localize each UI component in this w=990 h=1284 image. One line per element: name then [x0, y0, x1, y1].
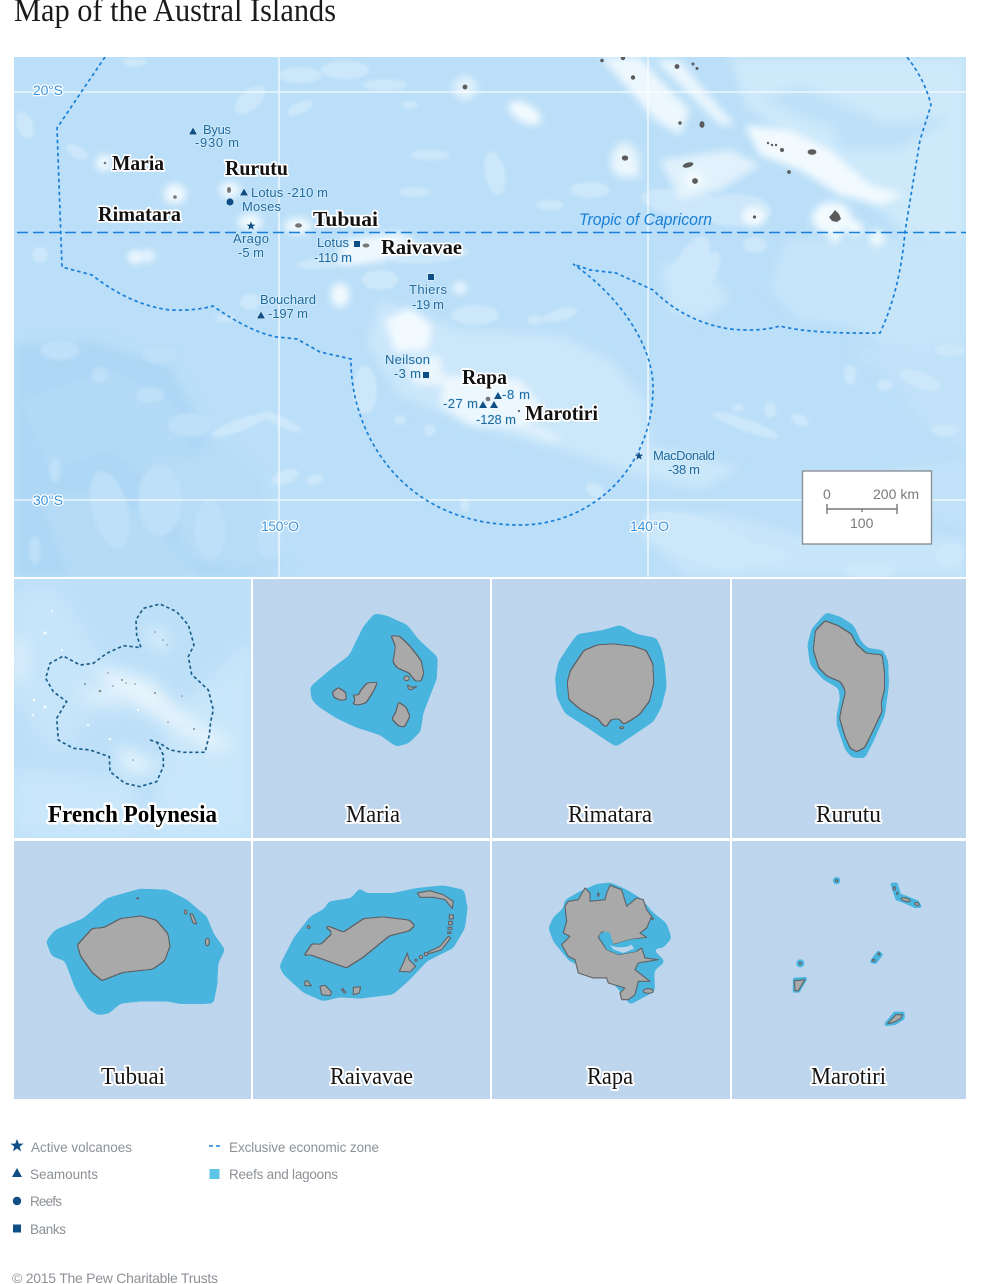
- scale bar: 0: [823, 486, 831, 502]
- seamount, bank and reef labels: Lotus -210 m: [251, 185, 328, 200]
- seamount, bank and reef labels: -5 m: [238, 245, 264, 260]
- island names: Raivavae: [381, 235, 462, 259]
- seamount, bank and reef labels: Byus: [203, 122, 232, 137]
- tropic of capricorn line: [17, 232, 966, 234]
- seamount, bank and reef labels: Lotus: [317, 235, 350, 250]
- seamount, bank and reef labels: MacDonald: [653, 448, 715, 463]
- coordinate labels: 140°O: [630, 518, 669, 534]
- seamount, bank and reef labels: -8 m: [502, 387, 530, 402]
- label: Rapa: Rapa: [587, 1064, 633, 1090]
- coordinate labels: 20°S: [33, 82, 63, 98]
- inset: Rapa: [492, 841, 730, 1099]
- island names: [98, 151, 598, 425]
- dashed EEZ outline: [46, 604, 213, 787]
- island names: Maria: [112, 151, 164, 175]
- legend item: reefs: [13, 1194, 62, 1209]
- legend item: reefs and lagoons: Reefs and lagoons: [229, 1167, 338, 1182]
- exclusive economic zone boundary: [57, 57, 931, 525]
- light seamount blobs: [13, 57, 966, 579]
- seamount, bank and reef labels: Thiers: [409, 282, 448, 297]
- scale bar: 100: [850, 515, 874, 531]
- seamount, bank and reef labels: -3 m: [394, 366, 421, 381]
- inset: Maria: [253, 579, 490, 838]
- muted lower-left seamount blobs: [29, 340, 284, 564]
- island names: Rimatara: [98, 202, 181, 226]
- coordinate labels: [33, 82, 669, 534]
- islands on main map: [104, 56, 841, 412]
- inset: Rimatara: [492, 579, 730, 838]
- legend item: seamounts: Seamounts: [30, 1167, 98, 1182]
- legend item: active volcanoes: Active volcanoes: [31, 1140, 132, 1155]
- coordinate labels: 30°S: [33, 492, 63, 508]
- inset: Marotiri: [732, 841, 966, 1099]
- seamount, bank and reef labels: Moses: [242, 199, 282, 214]
- label: Rimatara: Rimatara: [568, 802, 652, 828]
- label: Marotiri: Marotiri: [811, 1064, 886, 1090]
- label: Rurutu: Rurutu: [816, 802, 881, 828]
- legend item: banks: [13, 1222, 66, 1237]
- seamount, bank and reef labels: [195, 122, 715, 477]
- scale bar: [802, 471, 932, 544]
- label: Raivavae: Raivavae: [330, 1064, 413, 1090]
- seamount, bank and reef labels: -930 m: [195, 135, 239, 150]
- seamount, bank and reef labels: -27 m: [443, 396, 478, 411]
- map markers: [189, 128, 643, 460]
- island names: Marotiri: [525, 401, 598, 425]
- scale bar: 200 km: [873, 486, 919, 502]
- label: French Polynesia: French Polynesia: [48, 802, 217, 828]
- seamount, bank and reef labels: -19 m: [412, 297, 444, 312]
- island names: Tubuai: [313, 207, 378, 231]
- tropic of capricorn label: Tropic of Capricorn: [579, 210, 712, 229]
- legend item: reefs: Reefs: [30, 1194, 62, 1209]
- grid lines: [14, 57, 966, 577]
- legend item: exclusive economic zone: Exclusive economic zone: [229, 1140, 379, 1155]
- inset: Tubuai: [14, 841, 251, 1099]
- label: Maria: Maria: [346, 802, 400, 828]
- seamount, bank and reef labels: -128 m: [476, 412, 516, 427]
- island names: Rurutu: [225, 156, 288, 180]
- white seamount chains: [96, 57, 905, 446]
- seamount, bank and reef labels: -38 m: [668, 462, 700, 477]
- seamount, bank and reef labels: -110 m: [314, 250, 352, 265]
- seamount, bank and reef labels: Bouchard: [260, 292, 316, 307]
- legend item: banks: Banks: [30, 1222, 66, 1237]
- ocean depth shading: [14, 57, 966, 577]
- seamount, bank and reef labels: Arago: [233, 231, 269, 246]
- label: Tubuai: Tubuai: [101, 1064, 165, 1090]
- legend: [10, 1139, 379, 1237]
- inset: Raivavae: [253, 841, 490, 1099]
- inset: Rurutu: [732, 579, 966, 838]
- seamount, bank and reef labels: Neilson: [385, 352, 430, 367]
- inset: French Polynesia: [14, 579, 251, 838]
- island names: Rapa: [462, 365, 507, 389]
- coordinate labels: 150°O: [261, 518, 299, 534]
- seamount, bank and reef labels: -197 m: [268, 306, 308, 321]
- panel: main map: [13, 56, 966, 579]
